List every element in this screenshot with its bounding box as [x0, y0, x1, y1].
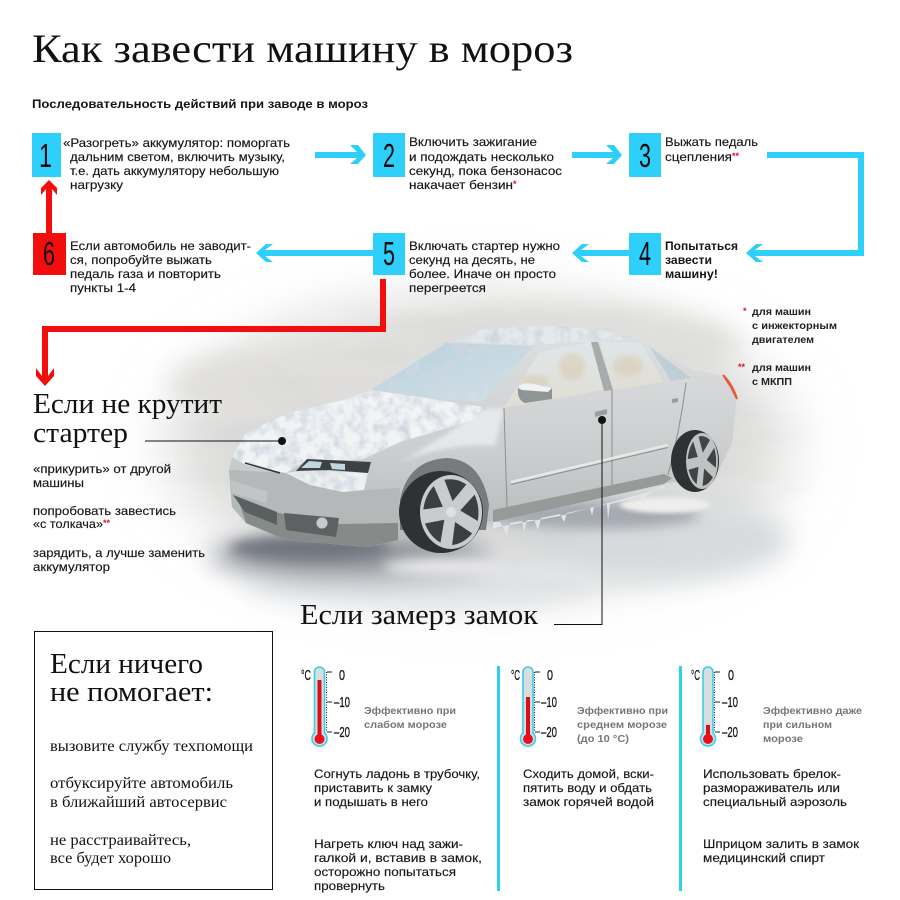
front wheel — [399, 458, 489, 553]
step 6 text: Если автомобиль не заводит- — [70, 239, 251, 253]
panel: if nothing helps — [34, 632, 272, 890]
thermometer 1: °C — [301, 667, 311, 684]
step 3 text: Выжать педаль — [665, 135, 758, 149]
tail light — [723, 375, 737, 399]
method text 1: осторожно попытаться — [314, 865, 456, 879]
footnotes: с инжекторным — [752, 320, 837, 332]
step 4: 4 — [639, 235, 651, 272]
thermometer 1: –20 — [334, 724, 350, 741]
method text 2: замок горячей водой — [523, 795, 654, 809]
thermometer 2: –10 — [541, 694, 557, 711]
door handles — [595, 398, 678, 417]
thermometer 2: °C — [511, 667, 520, 684]
step 4 text: Попытаться — [665, 239, 738, 253]
step 1 — [32, 133, 290, 192]
thermometer 2: 0 — [547, 667, 553, 684]
subtitle: Последовательность действий при заводе в мороз — [32, 97, 368, 111]
effectiveness note 3: Эффективно даже — [763, 705, 862, 717]
door sill — [493, 474, 672, 522]
effectiveness note 3 — [763, 705, 862, 745]
quarter window — [650, 347, 691, 381]
rear wheel — [671, 430, 719, 492]
fog lamp — [316, 517, 328, 529]
step 4 text: завести — [665, 253, 712, 267]
number box 6 — [33, 233, 66, 275]
number box 4 — [629, 233, 661, 275]
step 6 — [33, 233, 251, 295]
starter tips: аккумулятор — [33, 560, 110, 574]
column 3: severe frost — [691, 667, 862, 865]
starter tips: «прикурить» от другой — [33, 462, 171, 476]
arrow 6 to 1 — [41, 180, 57, 233]
column 1: weak frost — [301, 667, 482, 893]
effectiveness note 2: Эффективно при — [577, 705, 668, 717]
starter tips: «с толкача» — [33, 517, 103, 531]
arrow 2 to 3 — [572, 145, 622, 164]
step 4 — [629, 233, 738, 281]
thermometer 1: 0 — [339, 667, 345, 684]
footnotes — [738, 306, 837, 388]
column 2: medium frost — [511, 667, 668, 809]
heading: starter does not crank: Если не крутит — [33, 389, 222, 420]
front bumper — [229, 470, 400, 547]
effectiveness note 1: слабом морозе — [364, 719, 447, 731]
door seams — [504, 383, 686, 507]
thermometer 3: –20 — [722, 724, 738, 741]
step 6 text: педаль газа и повторить — [70, 267, 221, 281]
effectiveness note 1 — [364, 705, 456, 731]
thermometer 3: 0 — [728, 667, 734, 684]
panel heading: не помогает: — [50, 677, 213, 708]
step 2 — [373, 133, 562, 192]
number box 3 — [629, 133, 661, 177]
method text 2: Сходить домой, вски- — [523, 767, 654, 781]
thermometer 1 — [301, 667, 350, 746]
arrow 4 to 5 — [572, 244, 629, 262]
callout line to hood — [145, 437, 286, 445]
method text 1 — [314, 767, 482, 893]
method text 2: пятить воду и обдать — [523, 781, 652, 795]
step 2: 2 — [383, 137, 395, 174]
thermometer 1: –10 — [334, 694, 350, 711]
effectiveness note 2 — [577, 705, 668, 745]
panel advice: вызовите службу техпомощи — [50, 738, 253, 755]
mirror — [518, 383, 552, 403]
red arrow from step 5 down to starter — [36, 279, 386, 386]
thermometer 3: °C — [691, 667, 700, 684]
effectiveness note 2: (до 10 °C) — [577, 734, 629, 745]
thermometer 2: –20 — [541, 724, 557, 741]
footnotes: двигателем — [752, 334, 814, 346]
method text 1: галкой и, вставив в замок, — [314, 851, 482, 865]
step 6 text: пункты 1-4 — [70, 281, 136, 295]
step 4 text — [665, 239, 738, 281]
thermometer 2 — [511, 667, 557, 746]
footnotes: для машин — [752, 362, 811, 374]
method text 1: провернуть — [314, 879, 385, 893]
number box 5 — [373, 233, 405, 275]
method text 3 — [703, 767, 860, 865]
thermometer 3 — [691, 667, 738, 746]
step 3 text: сцепления — [665, 150, 732, 164]
effectiveness note 2: среднем морозе — [577, 720, 667, 731]
snow background — [130, 270, 830, 620]
step 6 text — [70, 239, 251, 295]
effectiveness note 1: Эффективно при — [364, 705, 456, 717]
method text 3: Использовать брелок- — [703, 767, 841, 781]
step 6: 6 — [43, 235, 55, 272]
step 6 text: ся, попробуйте выжать — [70, 253, 212, 267]
step 3 text — [665, 135, 758, 164]
windshield — [371, 343, 534, 402]
grille — [233, 495, 277, 525]
title: Как завести машину в мороз — [32, 26, 573, 71]
car shadow — [210, 497, 710, 576]
panel advice: не расстраивайтесь, — [50, 832, 191, 849]
wiper — [245, 463, 280, 473]
heading: starter does not crank: стартер — [33, 418, 128, 449]
method text 1: и подышать в него — [314, 795, 428, 809]
panel advice: отбуксируйте автомобиль — [50, 775, 233, 792]
method text 1: Нагреть ключ над зажи- — [314, 837, 463, 851]
seats — [521, 353, 643, 389]
heading: starter does not crank — [33, 389, 222, 449]
arrow 1 to 2 — [315, 145, 366, 164]
step 5 text — [409, 239, 560, 295]
arrow 3 to 4 — [746, 152, 864, 262]
headlight — [296, 459, 371, 473]
step 2 text — [409, 135, 562, 192]
side window front — [504, 342, 604, 408]
icicles — [493, 485, 664, 535]
step 2 text: * — [513, 179, 517, 189]
rub strip — [511, 445, 668, 482]
thermometer 3: –10 — [722, 694, 738, 711]
step 2 text: секунд, пока бензонасос — [409, 164, 562, 178]
step 1 text: дальним светом, включить музыку, — [70, 150, 285, 164]
step 5 text: Включать стартер нужно — [409, 239, 560, 253]
licence plate — [230, 480, 268, 503]
effectiveness note 3: при сильном — [763, 720, 832, 731]
method text 2 — [523, 767, 654, 809]
starter tips: машины — [33, 476, 84, 490]
footnotes: для машин — [752, 306, 811, 318]
heading: frozen lock: Если замерз замок — [300, 600, 538, 631]
panel advice — [50, 738, 253, 867]
panel advice: в ближайший автосервис — [50, 794, 227, 811]
panel advice: все будет хорошо — [50, 850, 171, 867]
starter tips — [33, 462, 205, 574]
panel heading: Если ничего — [50, 649, 203, 680]
footnotes: с МКПП — [752, 376, 792, 388]
step 5 — [373, 233, 560, 295]
step 2 text: и подождать несколько — [409, 150, 554, 164]
step 5 text: более. Иначе он просто — [409, 267, 556, 281]
car illustration — [229, 326, 737, 553]
hood snow — [232, 390, 482, 473]
step 1 text: нагрузку — [70, 178, 123, 192]
bumper snow — [286, 470, 368, 492]
method text 3: Шприцом залить в замок — [703, 837, 860, 851]
step 4 text: машину! — [665, 267, 718, 281]
step 1: 1 — [39, 137, 52, 174]
effectiveness note 3: морозе — [763, 734, 803, 745]
step 3 — [629, 133, 758, 177]
car body — [229, 340, 737, 547]
starter tips: зарядить, а лучше заменить — [33, 546, 205, 560]
step 2 text: накачает бензин — [409, 178, 513, 192]
number box 1 — [32, 133, 61, 177]
step 5 text: перегреется — [409, 281, 486, 295]
step 3: 3 — [639, 137, 651, 174]
method text 3: медицинский спирт — [703, 851, 826, 865]
fender highlight — [400, 408, 504, 462]
footnotes: ** — [738, 362, 746, 372]
panel heading — [50, 649, 213, 708]
step 5: 5 — [383, 235, 395, 272]
method text 3: специальный аэрозоль — [703, 795, 847, 809]
step 3 text: ** — [732, 151, 740, 161]
starter tips: ** — [103, 518, 111, 528]
step 1 text: т.е. дать аккумулятору небольшую — [70, 164, 279, 178]
door pillar — [591, 342, 613, 391]
column dividers — [497, 666, 682, 891]
arrow 5 to 6 — [256, 244, 373, 262]
method text 3: размораживатель или — [703, 781, 840, 795]
step 1 text — [63, 136, 290, 192]
step 5 text: секунд на десять, не — [409, 253, 535, 267]
front lower bumper — [240, 505, 398, 547]
side window rear — [600, 342, 664, 390]
number box 2 — [373, 133, 405, 177]
footnotes: * — [743, 306, 747, 316]
callout line to door lock — [554, 416, 606, 624]
starter tips: попробовать завестись — [33, 504, 176, 518]
method text 1: приставить к замку — [314, 781, 432, 795]
method text 1: Согнуть ладонь в трубочку, — [314, 767, 480, 781]
step 1 text: «Разогреть» аккумулятор: поморгать — [63, 136, 290, 150]
step 2 text: Включить зажигание — [409, 135, 537, 149]
roof snow — [454, 326, 639, 345]
